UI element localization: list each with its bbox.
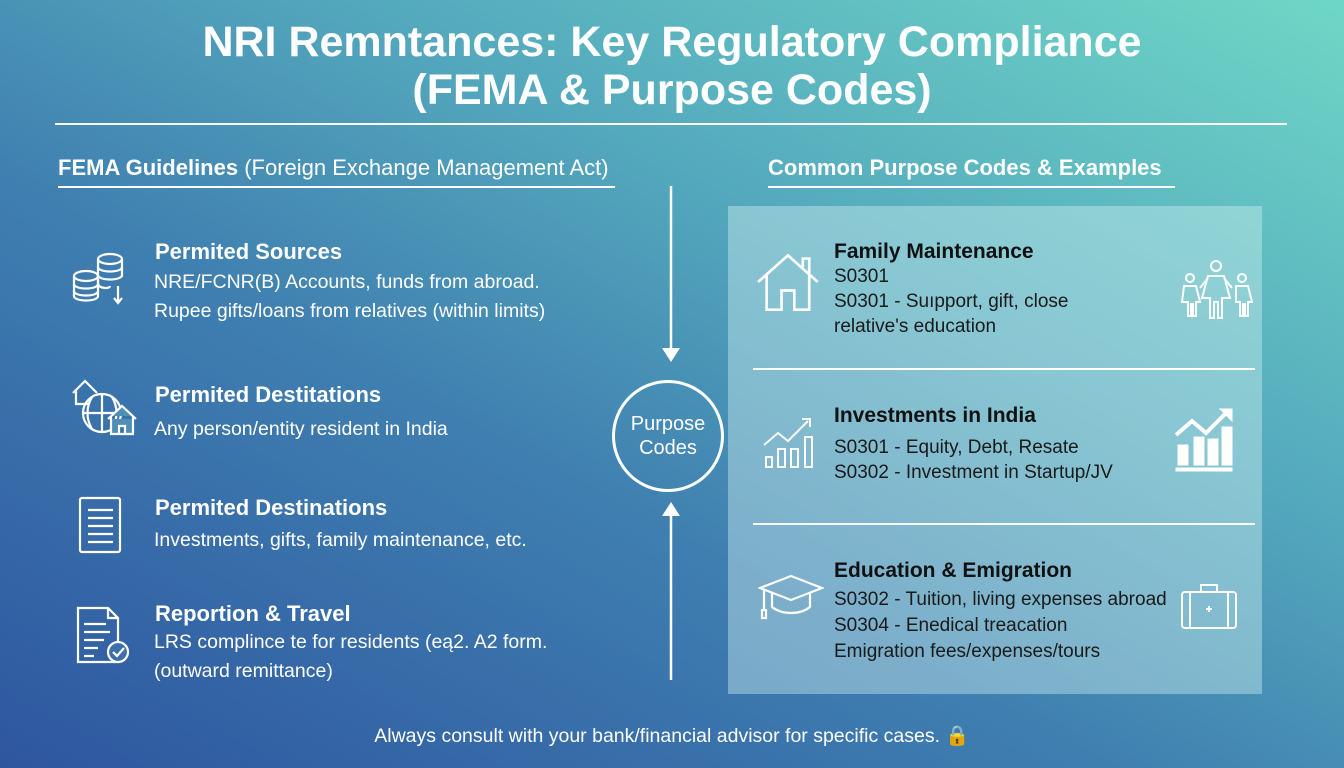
row: family maintenance: S0301 [834,266,889,287]
icon: growth chart solid [1174,408,1232,472]
title [202,18,1142,114]
circle: purpose codes: Purpose [631,413,705,435]
row: family maintenance: relative's education [834,316,996,337]
item: permitted sources: NRE/FCNR(B) Accounts, funds from abroad. [154,271,540,293]
icon: house [757,254,818,311]
item: permitted sources: Rupee gifts/loans from relatives (within limits) [154,300,545,322]
row: family maintenance: S0301 - Suıpport, gift, close [834,291,1068,312]
icon: coins [72,252,124,305]
panel: purpose codes [728,206,1262,694]
circle: purpose codes [612,380,724,492]
row: investments: Investments in India [834,404,1036,427]
arrow: up to circle [662,502,680,680]
title: (FEMA & Purpose Codes) [412,66,932,114]
right heading: Common Purpose Codes & Examples [768,155,1162,180]
circle: purpose codes: Codes [639,437,697,459]
icon: suitcase [1181,584,1237,629]
item: permitted destinations: Investments, gifts, family maintenance, etc. [154,529,527,551]
item: permitted sources [72,239,545,322]
footer note: Always consult with your bank/financial advisor for specific cases. 🔒 [374,725,970,747]
row: investments: S0301 - Equity, Debt, Resate [834,437,1079,458]
row: education: Education & Emigration [834,559,1072,582]
icon: document check [76,606,130,664]
row: investments: S0302 - Investment in Startup/JV [834,462,1113,483]
row: education: S0304 - Enedical treacation [834,615,1067,636]
row: education: Emigration fees/expenses/tours [834,641,1100,662]
icon: family [1180,260,1254,319]
icon: growth chart outline [763,418,813,468]
item: permitted destinations: Permited Destinations [155,495,387,520]
item: reporting & travel: LRS complince te for residents (eą2. A2 form. [154,631,547,653]
row: family maintenance [757,240,1254,337]
row: family maintenance: Family Maintenance [834,240,1034,263]
row: education: S0302 - Tuition, living expenses abroad [834,589,1167,610]
left heading: FEMA Guidelines (Foreign Exchange Management Act) [58,155,609,180]
row: education [758,559,1237,662]
item: permitted sources: Permited Sources [155,239,342,264]
item: permitted destitations: Any person/entity resident in India [154,418,448,440]
row: investments [763,404,1232,483]
item: reporting & travel [76,601,547,682]
icon: document [78,496,122,554]
icon: grad cap [758,574,824,620]
item: reporting & travel: Reportion & Travel [155,601,351,626]
item: permitted destitations: Permited Destitations [155,382,381,407]
item: permitted destitations [72,380,448,440]
item: permitted destinations [78,495,527,554]
arrow: down to circle [662,186,680,362]
icon: globe houses [72,380,137,436]
item: reporting & travel: (outward remittance) [154,660,333,682]
title: NRI Remntances: Key Regulatory Compliance [202,18,1142,66]
